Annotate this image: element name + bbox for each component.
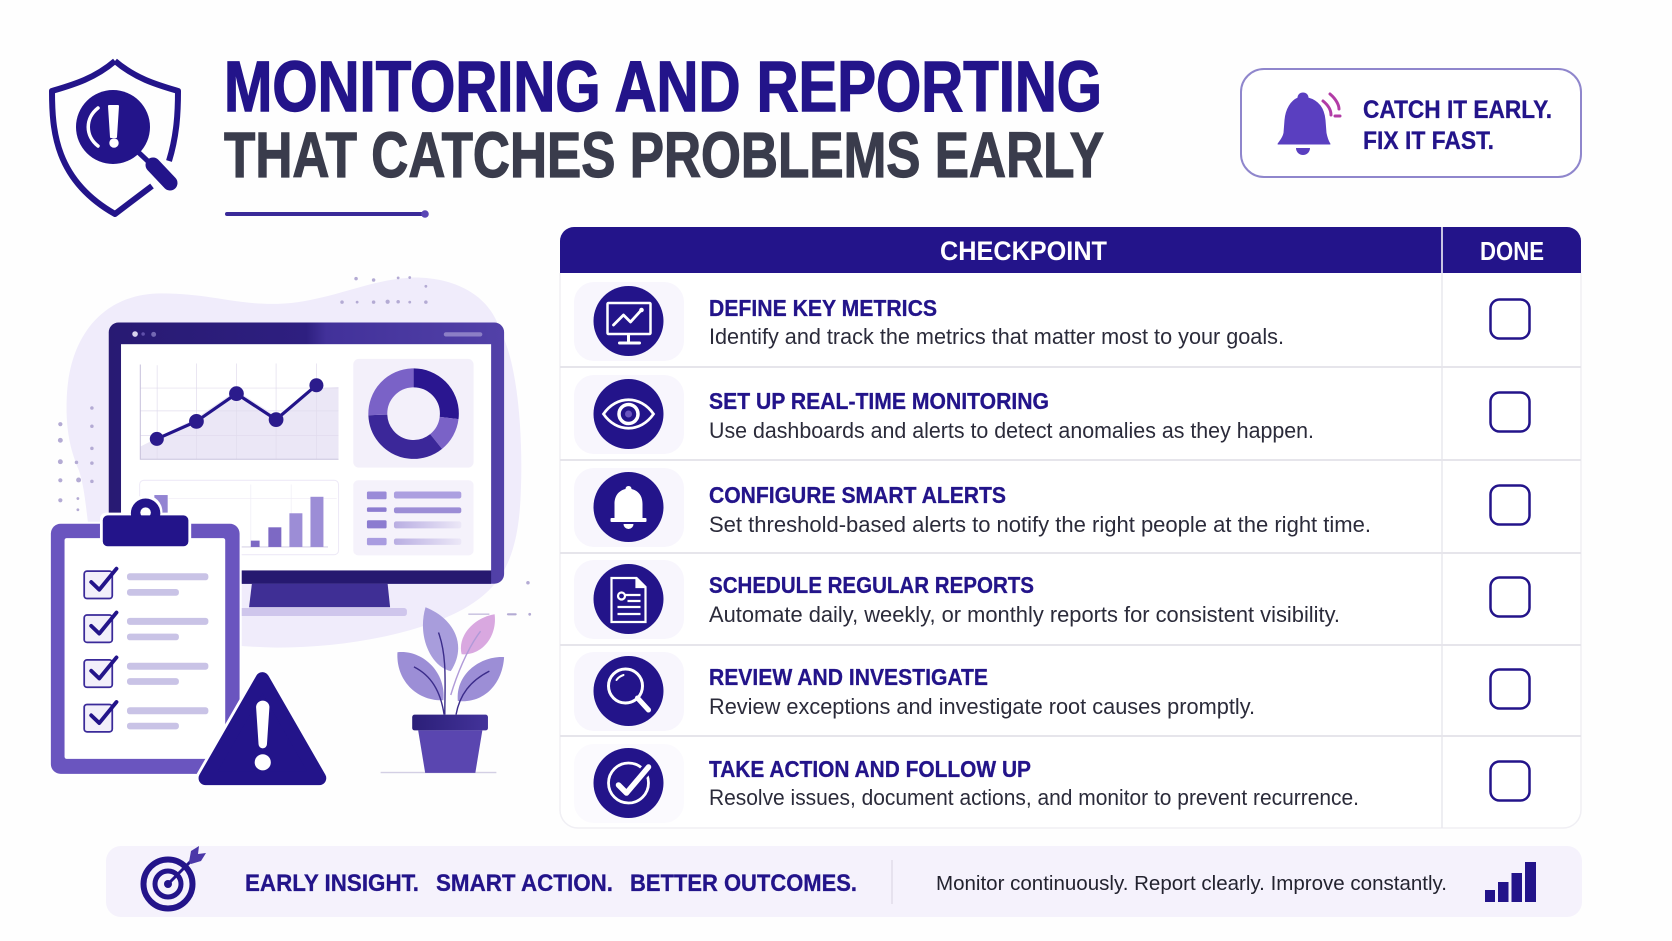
decorative dots xyxy=(58,276,531,616)
line chart xyxy=(140,363,339,459)
row: take action and follow up: TAKE ACTION AND FOLLOW UP xyxy=(709,756,1031,782)
row: take action and follow up: Resolve issues, document actions, and monitor to prevent recurrence. xyxy=(709,785,1359,810)
monitor xyxy=(109,322,504,616)
icon: bell xyxy=(1278,93,1340,155)
row: configure smart alerts xyxy=(574,468,1530,547)
row: set up real-time monitoring xyxy=(574,375,1530,454)
list panel xyxy=(353,480,474,555)
callout: catch it early: FIX IT FAST. xyxy=(1363,127,1494,155)
warning triangle xyxy=(206,679,319,778)
row: configure smart alerts: CONFIGURE SMART ALERTS xyxy=(709,482,1006,508)
row: define key metrics: DEFINE KEY METRICS xyxy=(709,295,937,321)
footer band: Monitor continuously. Report clearly. Improve constantly. xyxy=(936,872,1447,895)
clipboard checklist xyxy=(49,495,242,776)
row: review and investigate xyxy=(574,652,1530,731)
donut chart xyxy=(353,359,474,468)
title: MONITORING AND REPORTING xyxy=(224,48,1102,127)
title xyxy=(224,48,1104,191)
icon: signal bars xyxy=(1485,862,1536,902)
icon: target xyxy=(144,846,206,908)
checklist rows xyxy=(84,569,208,732)
row: take action and follow up xyxy=(574,744,1530,823)
icon: shield with magnifier xyxy=(52,61,178,214)
potted plant xyxy=(381,607,504,773)
footer band: SMART ACTION. xyxy=(436,870,613,897)
table body frame xyxy=(560,273,1581,828)
table header xyxy=(560,227,1581,273)
title: THAT CATCHES PROBLEMS EARLY xyxy=(224,119,1104,191)
row: set up real-time monitoring: SET UP REAL-TIME MONITORING xyxy=(709,388,1049,414)
row: schedule regular reports: SCHEDULE REGULAR REPORTS xyxy=(709,572,1034,598)
bar chart xyxy=(140,480,339,555)
illustration: monitoring dashboard xyxy=(49,276,531,778)
row: schedule regular reports xyxy=(574,560,1530,639)
background blob xyxy=(67,278,521,648)
callout: catch it early xyxy=(1241,69,1581,177)
row: define key metrics xyxy=(574,282,1530,361)
panel: checkpoint table xyxy=(560,227,1581,828)
row: review and investigate: REVIEW AND INVESTIGATE xyxy=(709,664,988,690)
row: set up real-time monitoring: Use dashboards and alerts to detect anomalies as they happen. xyxy=(709,418,1314,443)
row: define key metrics: Identify and track the metrics that matter most to your goals. xyxy=(709,324,1284,349)
footer band: BETTER OUTCOMES. xyxy=(630,870,857,897)
callout: catch it early: CATCH IT EARLY. xyxy=(1363,96,1552,124)
row: review and investigate: Review exceptions and investigate root causes promptly. xyxy=(709,694,1255,719)
row: configure smart alerts: Set threshold-based alerts to notify the right people at the right time. xyxy=(709,512,1371,537)
footer band: EARLY INSIGHT. xyxy=(245,870,419,897)
table header: CHECKPOINT xyxy=(940,236,1107,266)
table header: DONE xyxy=(1480,236,1544,266)
title underline xyxy=(225,210,429,218)
footer band xyxy=(106,846,1582,917)
row: schedule regular reports: Automate daily, weekly, or monthly reports for consistent visibility. xyxy=(709,602,1340,627)
